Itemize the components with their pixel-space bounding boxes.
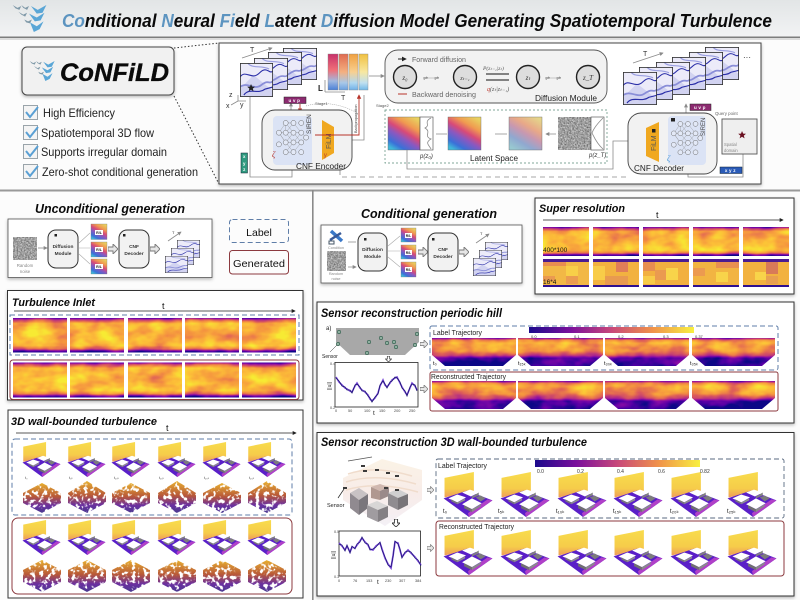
- line chart: hill sensor signal: 0.2: [330, 406, 335, 410]
- arrows to trajectories: [420, 340, 428, 393]
- colour bar: 3D: 0.6: [658, 469, 665, 475]
- input flow stack: y: [240, 102, 244, 109]
- line chart: 3D sensor signal: t: [377, 579, 379, 586]
- label trajectory: t₃₅ₖ: [690, 361, 699, 367]
- panel: latent space: Latent Space: [470, 154, 519, 163]
- diffusion module: Diffusion: [53, 244, 73, 250]
- panel: latent space: p(z_T): [588, 153, 606, 159]
- label trajectory: t₀: [443, 509, 448, 515]
- input x y z (encoder): [241, 153, 248, 173]
- line chart: 3D sensor signal: 384: [415, 579, 421, 583]
- encoded latent bars: T: [341, 95, 346, 102]
- line chart: hill sensor signal: 250: [409, 409, 415, 413]
- diffusion module: Module: [364, 254, 381, 260]
- label trajectory: t₃₀ₖ: [604, 361, 613, 367]
- panel: CNF encoder: γ: [324, 151, 327, 159]
- input x y z (encoder): x: [243, 154, 246, 159]
- panel: diffusion module: Diffusion Module: [535, 94, 598, 103]
- line chart: 3D sensor signal: 153: [366, 579, 372, 583]
- 3D sensor cube figure: Sensor: [327, 503, 345, 509]
- panel: diffusion module: Forward diffusion: [412, 57, 466, 64]
- label trajectory: t₀: [433, 361, 437, 367]
- heading: unconditional generation: Unconditional generation: [35, 201, 185, 216]
- high-resolution row: [543, 227, 789, 256]
- label group: t₁₀ₖ: [114, 476, 120, 480]
- line chart: 3D sensor signal: 0.5: [334, 530, 339, 534]
- diffusion module: Module: [55, 251, 72, 257]
- label trajectory: [430, 326, 778, 370]
- line chart: 3D sensor signal: 76: [353, 579, 357, 583]
- panel: turbulence inlet: [8, 290, 303, 400]
- feature checklist: [24, 106, 198, 179]
- legend: label: Label: [246, 227, 272, 239]
- panel: CNF decoder: SIREN: [701, 118, 707, 136]
- query point domain: [715, 111, 757, 154]
- line chart: hill sensor signal: ||u||: [327, 382, 333, 390]
- arrows to trajectories: [427, 486, 434, 552]
- legend: label: [230, 220, 288, 242]
- header band: [0, 0, 800, 40]
- panel: super resolution: [535, 198, 794, 294]
- heading: Sensor reconstruction periodic hill: [321, 306, 503, 320]
- diffusion module: [358, 233, 387, 271]
- generated row: [10, 360, 299, 400]
- title: Conditional Neural Field Latent Diffusion Model Generating Spatiotemporal Turbulence: [62, 11, 772, 31]
- arrow down: [386, 356, 392, 362]
- line chart: hill sensor signal: [327, 362, 418, 417]
- colour bar: 3D: [535, 460, 710, 475]
- arrow down: [392, 519, 400, 527]
- label trajectory: t₁₅ₖ: [518, 361, 527, 367]
- latent samples: R/L: [406, 234, 411, 238]
- high-resolution row: 400*100: [543, 247, 568, 254]
- line chart: hill sensor signal: 150: [379, 409, 385, 413]
- label trajectory: Label Trajectory: [433, 330, 482, 337]
- time arrow: t: [162, 301, 165, 311]
- stage labels: Stage1: [315, 101, 328, 106]
- sensor geometry: Sensor: [322, 354, 338, 360]
- random noise: noise: [20, 269, 31, 274]
- line chart: hill sensor signal: 0.4: [330, 362, 335, 366]
- check item 4: Zero-shot conditional generation: [42, 165, 198, 179]
- input flow stack: T: [250, 47, 255, 54]
- panel: diffusion module: zₜ₋₁: [459, 76, 470, 82]
- output flow stack: T: [643, 51, 648, 58]
- colour bar: 3D: 0.2: [577, 469, 584, 475]
- colour bar: hill: 0.3: [663, 334, 669, 339]
- panel: CNF decoder: ζ: [667, 154, 671, 163]
- 3D sensor cube figure: [327, 457, 422, 526]
- diffusion module: Diffusion: [362, 247, 383, 253]
- legend: generated: [230, 250, 288, 274]
- panel: architecture diagram: [219, 43, 761, 184]
- label trajectory: t₅ₖ: [498, 509, 505, 515]
- arrow: [459, 247, 469, 257]
- panel: CNF encoder: FiLM: [326, 133, 333, 149]
- reconstructed trajectory: [430, 372, 778, 411]
- arrow: [418, 247, 428, 257]
- colour bar: hill: 0.1: [574, 334, 580, 339]
- colour bar: hill: 0.37: [695, 334, 704, 339]
- colour bar: 3D: 0.0: [537, 469, 544, 475]
- arrow: latent to diffusion: [369, 75, 384, 77]
- encoded latent bars: L: [318, 84, 323, 93]
- panel: CNF decoder: CNF Decoder: [634, 164, 684, 173]
- output stack: T: [172, 230, 175, 235]
- label row: [10, 315, 299, 355]
- latent samples: R/L: [406, 251, 411, 255]
- panel: diffusion module: ⇌⋯⇌: [423, 75, 439, 82]
- latent samples: [79, 224, 107, 274]
- arrow: [108, 244, 118, 254]
- panel: diffusion module: z_T: [582, 74, 594, 82]
- reconstructed trajectory: Reconstructed Trajectory: [439, 524, 514, 531]
- section dividers: [0, 190, 800, 600]
- panel: unconditional flow: [8, 219, 212, 278]
- random noise: noise: [331, 277, 341, 281]
- input x y z (encoder): z: [243, 167, 246, 172]
- label group: t₂₅ₖ: [249, 476, 255, 480]
- latent samples: R/L: [406, 268, 411, 272]
- line chart: 3D sensor signal: ||u||: [331, 551, 337, 559]
- output u v p (decoder): uvp: [694, 105, 707, 110]
- line chart: 3D sensor signal: 0: [338, 579, 340, 583]
- query point domain: domain: [724, 148, 738, 153]
- latent samples: R/L: [96, 231, 103, 235]
- label group: t₀: [25, 476, 28, 480]
- panel: diffusion module: Backward denoising: [412, 92, 476, 99]
- arrow: [150, 244, 160, 254]
- output u v p (encoder): uvp: [289, 98, 301, 103]
- random noise: [327, 251, 346, 281]
- heading: Sensor reconstruction 3D wall-bounded turbulence: [321, 435, 587, 449]
- panel: sensor reconstruction 3D wall-bounded turbulence: [317, 432, 794, 596]
- label group: t₂₀ₖ: [204, 476, 210, 480]
- output flow stack: [623, 47, 751, 105]
- latent samples: [388, 228, 416, 277]
- label trajectory: [436, 459, 784, 518]
- condition icon: Condition: [328, 246, 344, 250]
- line chart: hill sensor signal: 0: [335, 409, 337, 413]
- legend: generated: Generated: [233, 258, 285, 270]
- panel: 3D wall-bounded turbulence: [8, 410, 303, 598]
- label group: t₁₅ₖ: [159, 476, 165, 480]
- colour bar: hill: 0.2: [618, 334, 624, 339]
- random noise: Random: [17, 263, 34, 268]
- colour bar: hill: [529, 327, 704, 339]
- panel: CNF encoder: SIREN: [306, 114, 313, 134]
- diffusion module: [48, 230, 78, 268]
- latent samples: R/L: [96, 265, 103, 269]
- encoded latent bars: [318, 54, 368, 102]
- input x y z (decoder): [720, 167, 742, 174]
- reconstructed trajectory: Reconstructed Trajectory: [431, 374, 506, 381]
- CNF decoder: [119, 230, 149, 268]
- icon: logo wave: [30, 61, 55, 81]
- line chart: 3D sensor signal: 230: [385, 579, 391, 583]
- query point domain: Query point: [715, 111, 738, 116]
- input flow stack: z: [229, 92, 233, 99]
- heading: Super resolution: [539, 203, 625, 215]
- CNF decoder: CNF: [438, 247, 448, 253]
- random noise: Random: [329, 272, 343, 276]
- line chart: 3D sensor signal: 307: [399, 579, 405, 583]
- CNF decoder: [428, 233, 458, 271]
- CNF decoder: Decoder: [433, 254, 453, 260]
- time arrow: t: [166, 423, 169, 433]
- panel: diffusion module: P(zₜ₋₁|zₜ): [482, 65, 504, 72]
- condition icon: [328, 231, 344, 250]
- reconstructed trajectory: [436, 521, 784, 576]
- line chart: 3D sensor signal: 0.3: [334, 575, 339, 579]
- input flow stack: [226, 47, 317, 110]
- panel: CNF decoder: [628, 113, 717, 174]
- panel: CNF encoder: CNF Encoder: [296, 162, 346, 171]
- line chart: 3D sensor signal: [331, 530, 421, 586]
- label trajectory: t₁₀ₖ: [556, 509, 565, 515]
- heading: 3D wall-bounded turbulence: [11, 416, 157, 428]
- output stack: [165, 230, 200, 273]
- query point domain: Spatial: [724, 142, 737, 147]
- random noise: [13, 237, 37, 274]
- line chart: hill sensor signal: 200: [394, 409, 400, 413]
- input x y z (encoder): y: [243, 161, 246, 166]
- input flow stack: x: [226, 103, 230, 110]
- output u v p (encoder): [284, 97, 306, 104]
- check item 1: High Efficiency: [43, 106, 115, 120]
- connector lines: [250, 95, 743, 177]
- panel: diffusion module: zₜ: [525, 74, 531, 82]
- panel: conditional flow: [321, 225, 522, 283]
- label trajectory: Label Trajectory: [438, 463, 487, 470]
- panel: diffusion module: z₀: [401, 74, 408, 82]
- time arrow: t: [656, 210, 659, 220]
- output flow stack: ···: [743, 53, 751, 62]
- panel: CNF decoder: FiLM: [651, 135, 658, 151]
- label group: [12, 439, 292, 515]
- line chart: hill sensor signal: 100: [364, 409, 370, 413]
- icon: header logo: [13, 5, 46, 32]
- label trajectory: t₂₀ₖ: [670, 509, 679, 515]
- line chart: hill sensor signal: 50: [348, 409, 352, 413]
- stage labels: [315, 101, 389, 108]
- panel: diffusion module: q(zₜ|zₜ₋₁): [487, 86, 509, 93]
- heading: conditional generation: Conditional generation: [361, 206, 497, 221]
- stage labels: Stage2: [376, 103, 389, 108]
- output u v p (decoder): [690, 104, 711, 110]
- input x y z (decoder): xyz: [725, 168, 737, 173]
- panel: CNF encoder: [262, 110, 359, 171]
- CNF decoder: Decoder: [124, 251, 144, 257]
- output stack: T: [480, 231, 483, 236]
- CNF decoder: CNF: [129, 244, 139, 250]
- label trajectory: t₁₅ₖ: [613, 509, 622, 515]
- label group: t₅ₖ: [69, 476, 73, 480]
- latent samples: R/L: [96, 248, 103, 252]
- panel: CNF encoder: ζ: [272, 150, 276, 159]
- check item 3: Supports irregular domain: [41, 145, 167, 159]
- sensor geometry: [322, 326, 419, 360]
- colour bar: 3D: 0.82: [700, 469, 710, 475]
- panel: latent space: p(z₀): [419, 154, 433, 160]
- panel: diffusion module: [385, 50, 607, 103]
- line chart: hill sensor signal: t: [373, 410, 375, 417]
- panel: latent space: [385, 110, 607, 163]
- low-resolution row: [543, 259, 789, 287]
- low-resolution row: 16*4: [543, 279, 557, 286]
- output stack: [473, 231, 508, 276]
- connector lines: Backpropagation: [354, 104, 358, 133]
- panel: CoNFiLD logo: [22, 47, 174, 95]
- generated group: [12, 518, 292, 594]
- panel: diffusion module: ⇌⋯⇌: [545, 75, 561, 82]
- label trajectory: t₂₅ₖ: [727, 509, 736, 515]
- logo wordmark: CoNFiLD: [60, 59, 169, 87]
- colour bar: 3D: 0.4: [617, 469, 624, 475]
- heading: Turbulence Inlet: [12, 297, 96, 309]
- sensor geometry: a): [326, 326, 331, 332]
- check item 2: Spatiotemporal 3D flow: [41, 126, 154, 140]
- colour bar: hill: 0.0: [531, 334, 537, 339]
- panel: sensor reconstruction periodic hill: [317, 302, 794, 423]
